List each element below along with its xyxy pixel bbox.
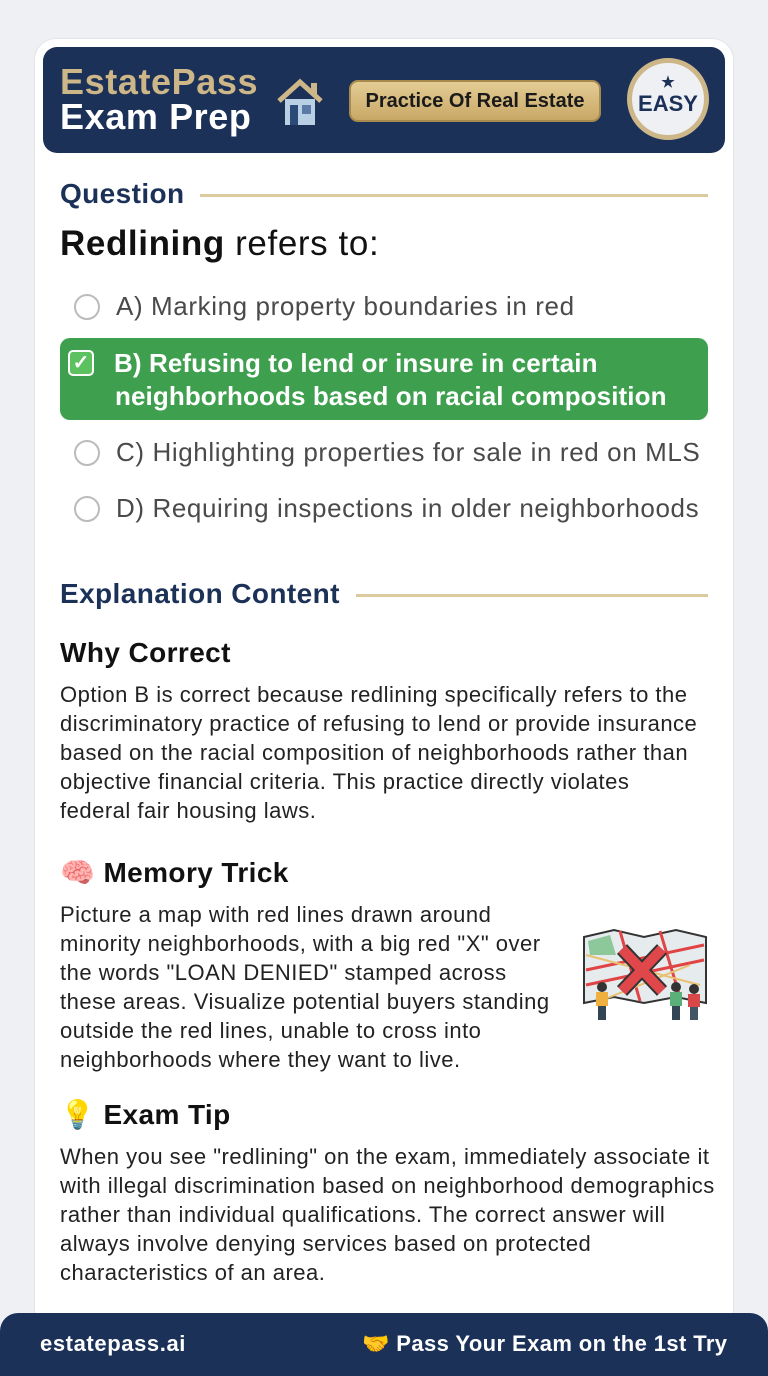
option D: D) Requiring inspections in older neighborhoods <box>116 493 699 523</box>
illustration: map with red X <box>583 929 707 1020</box>
question heading: Question <box>60 178 185 209</box>
category badge <box>349 80 601 122</box>
option B correct: neighborhoods based on racial composition <box>115 381 667 411</box>
why correct text: objective financial criteria. This practice directly violates <box>60 769 629 794</box>
footer bar <box>0 1313 768 1376</box>
question text: Redlining refers to: <box>60 224 379 263</box>
option B correct: B) Refusing to lend or insure in certain <box>114 348 598 378</box>
footer site: estatepass.ai <box>40 1331 186 1356</box>
footer slogan: 🤝 Pass Your Exam on the 1st Try <box>362 1331 727 1356</box>
exam tip heading: 💡 Exam Tip <box>60 1099 231 1130</box>
exam tip text <box>60 1144 715 1285</box>
option C: C) Highlighting properties for sale in red on MLS <box>116 437 700 467</box>
option A: A) Marking property boundaries in red <box>116 291 575 321</box>
brand title <box>60 61 258 137</box>
why correct heading: Why Correct <box>60 637 231 668</box>
memory trick text <box>60 902 550 1072</box>
difficulty badge: ★ <box>661 74 675 91</box>
explanation heading: Explanation Content <box>60 578 340 609</box>
brand title: Exam Prep <box>60 96 252 137</box>
memory trick text: the words "LOAN DENIED" stamped across <box>60 960 507 985</box>
memory trick heading: 🧠 Memory Trick <box>60 857 289 888</box>
memory trick text: minority neighborhoods, with a big red "X" over <box>60 931 541 956</box>
exam tip text: with illegal discrimination based on neighborhood demographics <box>60 1173 715 1198</box>
memory trick text: outside the red lines, unable to cross into <box>60 1018 481 1043</box>
exam tip text: always involve denying services based on protected <box>60 1231 591 1256</box>
exam tip text: When you see "redlining" on the exam, immediately associate it <box>60 1144 709 1169</box>
difficulty badge <box>627 58 709 140</box>
memory trick text: Picture a map with red lines drawn around <box>60 902 491 927</box>
memory trick text: these areas. Visualize potential buyers standing <box>60 989 550 1014</box>
memory trick text: neighborhoods where they want to live. <box>60 1047 461 1072</box>
difficulty badge: EASY <box>638 91 698 116</box>
option B correct <box>60 338 708 420</box>
exam tip text: characteristics of an area. <box>60 1260 325 1285</box>
icon: house <box>277 78 323 125</box>
option B correct: ✓ <box>73 352 89 374</box>
why correct text: based on the racial composition of neighborhoods rather than <box>60 740 688 765</box>
why correct text: federal fair housing laws. <box>60 798 316 823</box>
header banner <box>43 47 725 153</box>
exam tip text: rather than individual qualifications. The correct answer will <box>60 1202 665 1227</box>
why correct text: discriminatory practice of refusing to lend or provide insurance <box>60 711 697 736</box>
category badge: Practice Of Real Estate <box>366 90 584 112</box>
brand title: EstatePass <box>60 61 258 102</box>
why correct text <box>60 682 697 823</box>
why correct text: Option B is correct because redlining specifically refers to the <box>60 682 688 707</box>
